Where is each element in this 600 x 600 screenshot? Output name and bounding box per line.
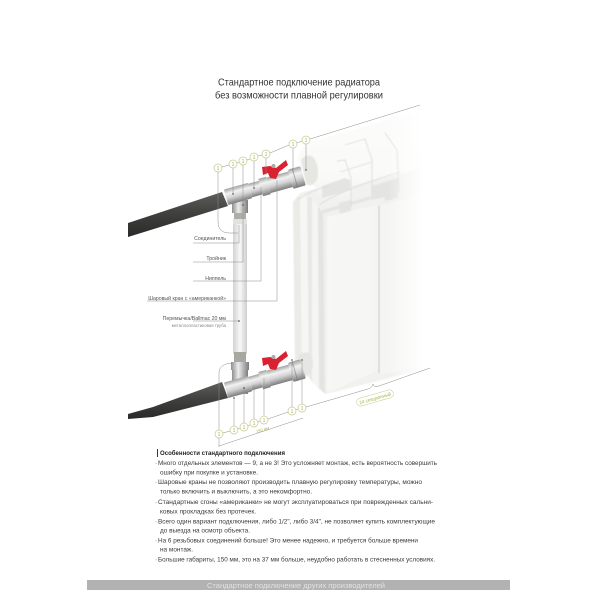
features list: · [155, 479, 157, 486]
features list: на монтаж. [160, 546, 193, 554]
component labels: Соединитель [194, 236, 226, 242]
radiator top plug [301, 155, 318, 185]
lower fitting assembly [223, 351, 306, 400]
bottom grey banner [87, 580, 510, 590]
upper fitting assembly [223, 160, 306, 224]
component labels: Перемычка/Ballmac 20 мм [163, 316, 226, 322]
features list: · [155, 460, 157, 467]
dimension line 150 mm: 150 мм [255, 425, 270, 434]
radiator bottom plug [298, 352, 313, 377]
marker numerals [217, 138, 308, 438]
title [215, 76, 383, 102]
marker numerals: 1 [265, 152, 268, 158]
features list: ошибку при покупке и установке. [160, 468, 258, 476]
radiator top collector [298, 113, 430, 208]
component labels: Тройник [206, 255, 227, 262]
bottom grey banner: Стандартное подключение других производителей [207, 581, 385, 590]
features heading: Особенности стандартного подключения [160, 449, 285, 457]
radiator section ribs [298, 133, 400, 207]
radiator under-collector shadows [322, 178, 398, 214]
radiator side fins [293, 194, 325, 394]
upper numbered markers [214, 136, 310, 172]
title: без возможности плавной регулировки [215, 90, 383, 102]
features list: ковых прокладках без протечек. [160, 508, 256, 516]
radiator right front panel [380, 192, 430, 374]
lower tee stem [231, 352, 249, 394]
features list: · [155, 518, 157, 526]
marker numerals: 1 [253, 155, 256, 161]
upper horizontal fittings [223, 166, 306, 207]
marker numerals: 1 [232, 162, 235, 168]
lower leader lines [219, 360, 430, 447]
lower red valve handle [262, 351, 288, 370]
features list: На 6 резьбовых соединений больше! Это менее надежно, и требуется больше времени [158, 536, 418, 544]
marker numerals: 1 [305, 138, 308, 144]
marker numerals: 1 [292, 142, 295, 148]
lower black insulated pipe [128, 382, 228, 419]
title: Стандартное подключение радиатора [218, 76, 380, 88]
component labels: металлопластиковая труба [172, 323, 227, 328]
features list: только включить и выключить, а это некомфортно. [160, 488, 312, 496]
marker numerals: 1 [217, 166, 220, 172]
dimension line 150 mm [219, 418, 303, 446]
features list: Всего один вариант подключения, либо 1/2", либо 3/4", не позволяет купить комплектующие [158, 518, 435, 526]
marker numerals: 1 [242, 159, 245, 165]
radiator [293, 100, 436, 400]
marker numerals: 1 [233, 428, 236, 434]
marker numerals: 1 [263, 418, 266, 424]
radiator panel gap [378, 206, 380, 373]
upper black insulated pipe [128, 192, 228, 237]
marker numerals: 1 [218, 432, 221, 438]
component labels: Шаровый кран с «американкой» [148, 295, 226, 302]
features list [155, 460, 438, 564]
marker numerals: 1 [243, 425, 246, 431]
upper red valve handle [262, 160, 288, 179]
radiator left front panel [323, 205, 378, 392]
features list: до выезда на осмотр объекта. [160, 526, 250, 534]
features section [155, 449, 438, 564]
features list: Стандартные сгоны «американки» не могут эксплуатироваться при поврежденных сальни- [158, 499, 433, 506]
white metal-plastic jumper pipe [233, 222, 247, 354]
lower horizontal fittings [223, 359, 306, 400]
features list: Большие габариты, 150 мм, это на 37 мм больше, неудобно работать в стесненных условиях. [158, 556, 435, 564]
upper valve stem [272, 164, 276, 168]
features list: · [155, 538, 157, 544]
upper leader lines [147, 105, 420, 321]
radiator fade [388, 100, 436, 400]
lower numbered markers [215, 404, 306, 438]
marker numerals: 1 [291, 409, 294, 415]
features list: Шаровые краны не позволяют производить плавную регулировку температуры, можно [158, 479, 422, 486]
upper tee stem [232, 200, 248, 224]
lower valve stem [272, 355, 276, 359]
section count pill: 14 секционный [358, 391, 392, 406]
marker numerals: 1 [253, 421, 256, 427]
leader line dots [232, 169, 307, 399]
radiator body [293, 113, 430, 394]
features list: · [155, 556, 157, 564]
component labels [148, 236, 227, 328]
features list: Много отдельных элементов — 9, а не 3! Это усложняет монтаж, есть вероятность совершить [158, 460, 438, 467]
features list: · [155, 499, 157, 506]
component labels: Ниппель [205, 276, 226, 282]
marker numerals: 1 [301, 406, 304, 412]
